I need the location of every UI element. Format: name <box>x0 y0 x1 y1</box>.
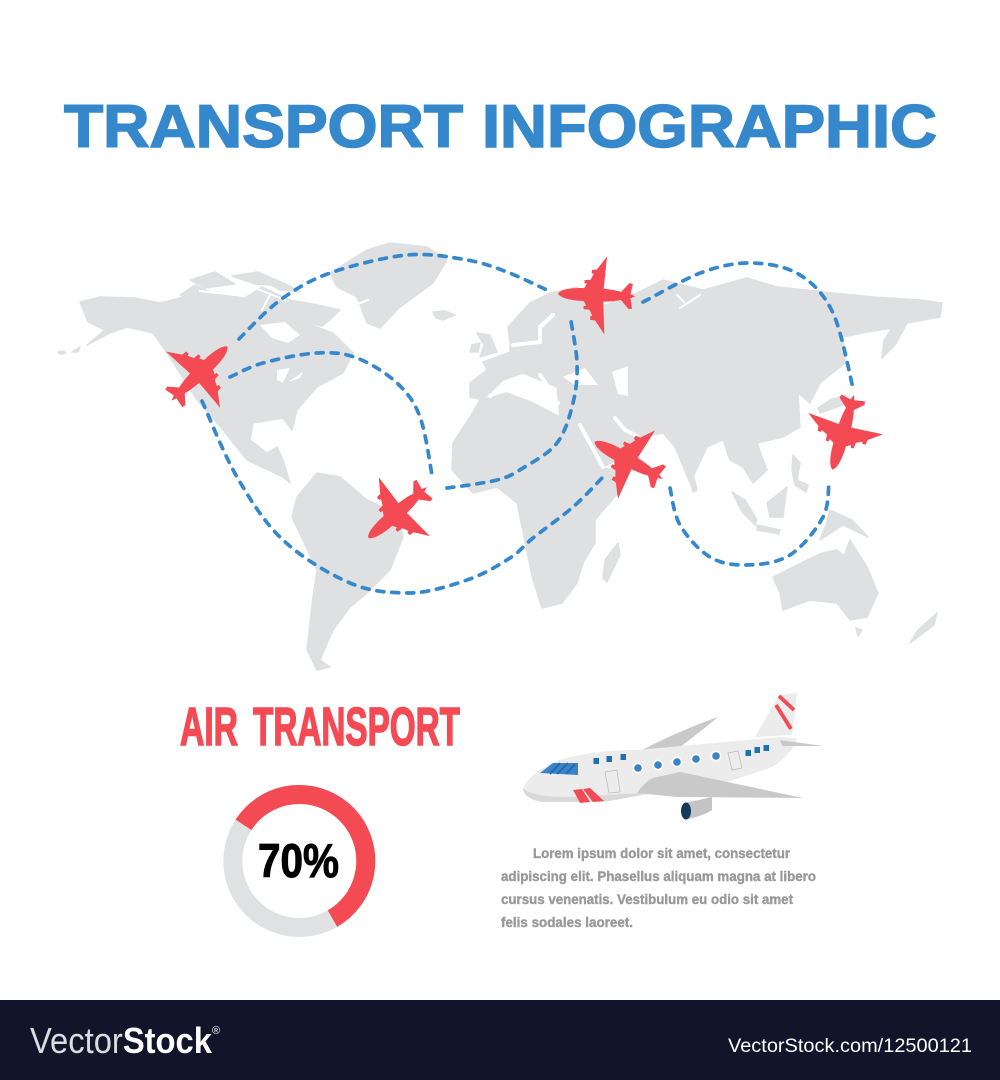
body text: Lorem ipsum dolor sit amet, consectetur <box>533 845 791 861</box>
cabin doors <box>605 751 742 793</box>
icon: plane over Northern Europe <box>557 255 637 335</box>
airplane markers <box>144 255 891 567</box>
title <box>64 92 937 160</box>
footer bar <box>0 1000 1000 1080</box>
icon: plane over South America <box>343 458 452 567</box>
cabin windows <box>594 745 769 764</box>
seas <box>260 322 628 449</box>
icon: plane over Middle East <box>576 408 681 513</box>
title: INFOGRAPHIC <box>482 92 937 160</box>
body text: adipiscing elit. Phasellus aliquam magna at libero <box>501 868 816 884</box>
route: North America to Northern Europe <box>239 254 547 339</box>
heading: air transport: AIR <box>180 697 238 757</box>
heading: air transport <box>180 697 460 757</box>
route: Northern Europe to East Asia <box>643 263 853 388</box>
title: TRANSPORT <box>64 92 463 160</box>
windshield <box>540 763 578 775</box>
footer image id: VectorStock.com/12500121 <box>728 1036 972 1057</box>
footer bar: ® <box>212 1025 220 1037</box>
donut value: 70% <box>258 834 339 887</box>
near wing <box>637 772 803 798</box>
belly stripes <box>573 788 604 803</box>
engine <box>687 797 712 819</box>
route: Middle East to East Asia <box>670 482 829 565</box>
tail stabilizer <box>780 740 823 746</box>
far wing <box>642 717 718 750</box>
route: South America to Northern Europe <box>447 315 577 488</box>
heading: air transport: TRANSPORT <box>253 697 460 757</box>
body text: felis sodales laoreet. <box>501 914 633 930</box>
body text <box>501 845 816 930</box>
route: North America to South America <box>230 353 432 475</box>
donut chart: 70% <box>233 794 366 928</box>
icon: plane over North America <box>144 319 254 428</box>
footer logo: VectorStock <box>30 1020 213 1061</box>
flight routes <box>202 254 853 593</box>
icon: plane over East Asia <box>795 384 891 480</box>
tail fin <box>755 693 797 737</box>
illustration: passenger airplane <box>523 693 823 820</box>
world map <box>58 243 942 670</box>
body text: cursus venenatis. Vestibulum eu odio sit amet <box>501 891 793 907</box>
fuselage <box>523 737 797 802</box>
route: North America to Middle East <box>202 401 603 593</box>
